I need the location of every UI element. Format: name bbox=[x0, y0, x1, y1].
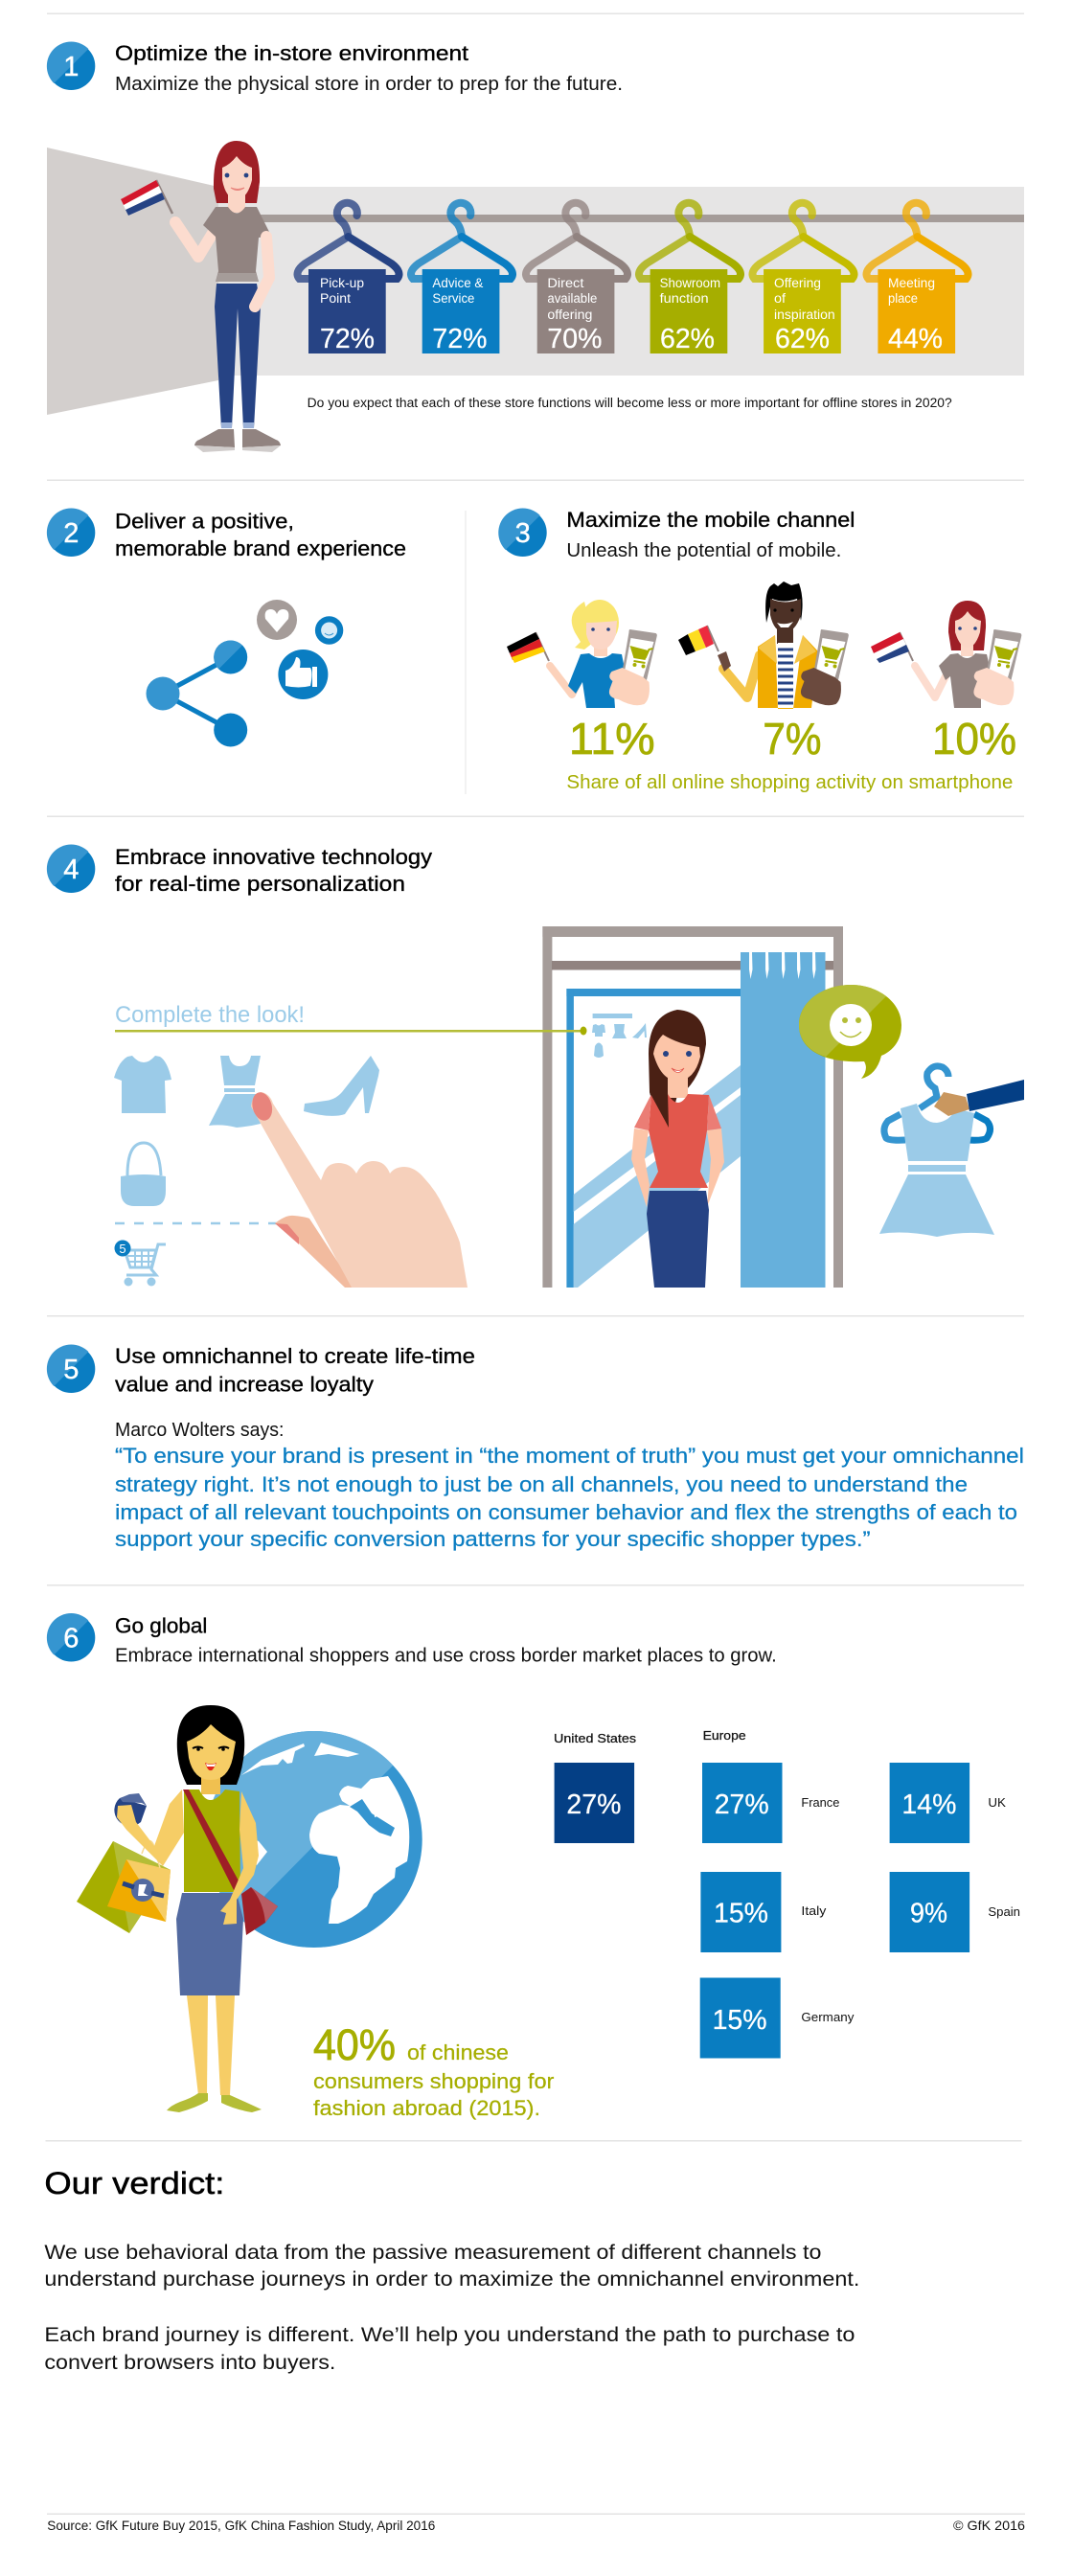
hanger tag: direct available offering bbox=[526, 203, 627, 354]
heading 5: value and increase loyalty bbox=[115, 1372, 374, 1397]
hanger tag: offering of inspiration: inspiration bbox=[774, 308, 835, 322]
hanger tag: showroom function bbox=[639, 203, 741, 354]
divider top bbox=[47, 13, 1024, 14]
number badge 2: 2 bbox=[63, 518, 79, 549]
heading 2: memorable brand experience bbox=[115, 536, 406, 560]
quote: strategy right. It’s not enough to just be on all channels, you need to understand the bbox=[115, 1472, 968, 1496]
tile: France 27% bbox=[702, 1763, 839, 1843]
tile: Spain 9%: 9% bbox=[910, 1899, 947, 1929]
stat: 40% of Chinese consumers: consumers shopping for bbox=[313, 2069, 554, 2093]
quote attribution: Marco Wolters says: bbox=[115, 1420, 284, 1441]
number badge 3 bbox=[498, 509, 547, 557]
hanger tag: meeting place: Meeting bbox=[888, 276, 935, 290]
number badge 5 bbox=[47, 1345, 95, 1393]
hanger tag: showroom function: 62% bbox=[660, 324, 715, 354]
dashed separator bbox=[115, 1222, 278, 1224]
tile: United States 27%: 27% bbox=[566, 1790, 621, 1820]
smiley speech bubble bbox=[799, 985, 901, 1079]
label: United States: United States bbox=[554, 1731, 637, 1745]
heading 6: Go global bbox=[115, 1613, 207, 1638]
tile: UK 14%: 14% bbox=[901, 1790, 956, 1820]
label: Europe: Europe bbox=[703, 1728, 746, 1743]
hanger tag: pick-up point: Pick-up bbox=[320, 276, 364, 290]
source note: Source: GfK Future Buy 2015, GfK China Fashion Study, April 2016 bbox=[47, 2518, 435, 2533]
subheading 1: Maximize the physical store in order to prep for the future. bbox=[115, 74, 623, 95]
hanger tag: direct available offering: 70% bbox=[547, 324, 602, 354]
mirror bbox=[566, 989, 741, 1288]
verdict section bbox=[44, 2166, 859, 2374]
tile: UK 14% bbox=[890, 1763, 1006, 1843]
stat: 40% of Chinese consumers: fashion abroad (2015). bbox=[313, 2096, 540, 2120]
hanger tag: direct available offering: offering bbox=[547, 308, 592, 322]
mirror screen mini icons bbox=[592, 1014, 647, 1058]
verdict paragraph 2: Each brand journey is different. We’ll help you understand the path to purchase to bbox=[44, 2324, 855, 2346]
icon: handbag bbox=[121, 1143, 166, 1206]
tile: France 27%: 27% bbox=[715, 1790, 769, 1820]
figure: woman with Dutch flag bbox=[121, 141, 281, 452]
icon: share network bbox=[146, 640, 247, 747]
clothes rail bbox=[254, 215, 1024, 222]
copyright: © GfK 2016 bbox=[953, 2518, 1025, 2533]
section 6: go global bbox=[47, 1613, 1020, 2120]
label: complete the look: Complete the look! bbox=[115, 1002, 305, 1028]
globe bbox=[213, 1731, 422, 1948]
number badge 1 bbox=[47, 42, 95, 90]
icon: shopping cart with count bbox=[115, 1240, 166, 1286]
curtain bbox=[741, 952, 826, 1288]
quote: “To ensure your brand is present in “the moment of truth” you must get your omnichannel bbox=[115, 1444, 1024, 1468]
section divider vertical bbox=[466, 511, 467, 794]
stat: 40% of Chinese consumers: 40% bbox=[313, 2020, 396, 2069]
number badge 6: 6 bbox=[63, 1623, 79, 1653]
number badge 4: 4 bbox=[63, 855, 79, 885]
hanger tag: direct available offering: available bbox=[547, 291, 597, 306]
hanger tag: advice and service: Advice & bbox=[432, 276, 483, 290]
pointer line bbox=[115, 1027, 586, 1035]
stat: Germany 11%: 11% bbox=[569, 714, 655, 764]
section 5: omnichannel bbox=[47, 1344, 1024, 1551]
stat: 40% of Chinese consumers bbox=[313, 2020, 554, 2120]
subheading 6: Embrace international shoppers and use cross border market places to grow. bbox=[115, 1646, 777, 1667]
quote: impact of all relevant touchpoints on consumer behavior and flex the strengths of each to bbox=[115, 1500, 1017, 1524]
number badge 1: 1 bbox=[63, 52, 79, 82]
hanger tag: showroom function: Showroom bbox=[660, 276, 720, 290]
hanger tag: meeting place: 44% bbox=[888, 324, 943, 354]
heading 3: Maximize the mobile channel bbox=[566, 508, 855, 532]
number badge 4 bbox=[47, 845, 95, 893]
tile: Spain 9%: Spain bbox=[988, 1904, 1020, 1919]
stat: Netherlands 10%: 10% bbox=[932, 714, 1016, 764]
tile: Italy 15%: 15% bbox=[714, 1899, 768, 1929]
section 3: maximize the mobile channel bbox=[498, 508, 1021, 793]
quote: support your specific conversion patterns for your specific shopper types.” bbox=[115, 1527, 871, 1551]
hanger tag: pick-up point: Point bbox=[320, 291, 351, 306]
hanger tag: direct available offering: Direct bbox=[547, 276, 584, 290]
verdict paragraph 1: We use behavioral data from the passive measurement of different channels to bbox=[44, 2242, 821, 2264]
section 2: positive brand experience bbox=[47, 509, 406, 747]
hanger tag: offering of inspiration: 62% bbox=[775, 324, 830, 354]
divider 4 bbox=[47, 1315, 1024, 1316]
heading 4: Embrace innovative technology bbox=[115, 845, 432, 869]
footer divider bbox=[47, 2514, 1025, 2515]
number badge 5: 5 bbox=[63, 1355, 79, 1385]
heading 2: Deliver a positive, bbox=[115, 510, 294, 533]
hanger tag: offering of inspiration: Offering bbox=[774, 276, 821, 290]
icon: heart bubble bbox=[257, 600, 297, 640]
hanger tag: meeting place: place bbox=[888, 291, 918, 306]
fitting room frame bbox=[542, 926, 843, 1288]
hanger tag: showroom function: function bbox=[660, 291, 709, 306]
divider 2 bbox=[47, 479, 1024, 481]
number badge 2 bbox=[47, 509, 95, 557]
heading 4: for real-time personalization bbox=[115, 872, 405, 896]
figure: woman in fitting room bbox=[631, 1010, 724, 1288]
hanger tag: advice and service bbox=[411, 203, 513, 354]
survey question: Do you expect that each of these store functions will become less or more important for offline stores in 2020? bbox=[308, 396, 952, 410]
icon: dress bbox=[209, 1056, 261, 1128]
tile: UK 14%: UK bbox=[988, 1795, 1006, 1810]
icon: t-shirt bbox=[114, 1056, 171, 1113]
divider 3 bbox=[47, 816, 1024, 817]
verdict heading: Our verdict: bbox=[44, 2166, 224, 2200]
hanger tag: advice and service: 72% bbox=[432, 324, 487, 354]
tile: Germany 15% bbox=[700, 1977, 855, 2058]
figure: red-haired woman with Dutch flag and phone bbox=[871, 601, 1021, 708]
icon: shopping cart with count: 5 bbox=[119, 1242, 126, 1256]
verdict paragraph 2: convert browsers into buyers. bbox=[44, 2352, 335, 2374]
caption: smartphone share: Share of all online shopping activity on smartphone bbox=[566, 772, 1013, 793]
icon: smile bubble bbox=[315, 616, 343, 645]
tile: Germany 15%: Germany bbox=[801, 2010, 855, 2024]
heading 5: Use omnichannel to create life-time bbox=[115, 1344, 475, 1368]
stat: Belgium 7%: 7% bbox=[763, 714, 821, 764]
tile: France 27%: France bbox=[801, 1795, 839, 1810]
figure: shopper woman bbox=[77, 1705, 278, 2112]
tile: Italy 15% bbox=[700, 1872, 827, 1952]
illustration: pointing hand bbox=[249, 1090, 468, 1288]
tile: Italy 15%: Italy bbox=[801, 1904, 827, 1918]
tile: Spain 9% bbox=[890, 1872, 1020, 1952]
tile: United States 27% bbox=[555, 1763, 634, 1843]
verdict paragraph 1: understand purchase journeys in order to maximize the omnichannel environment. bbox=[44, 2268, 859, 2291]
hanger tag: advice and service: Service bbox=[432, 291, 474, 306]
hanger tag: pick-up point bbox=[297, 203, 399, 354]
tile: Germany 15%: 15% bbox=[713, 2005, 767, 2036]
section 1: optimize the in-store environment bbox=[47, 41, 1024, 452]
hanger tag: pick-up point: 72% bbox=[320, 324, 375, 354]
figure: man with Belgian flag and phone bbox=[678, 581, 849, 709]
figure: blonde woman with German flag and phone bbox=[507, 600, 657, 708]
subheading 3: Unleash the potential of mobile. bbox=[566, 540, 841, 561]
number badge 3: 3 bbox=[515, 518, 531, 549]
heading 1: Optimize the in-store environment bbox=[115, 41, 468, 65]
divider 6 bbox=[46, 2140, 1021, 2142]
hanger tag: offering of inspiration: of bbox=[774, 291, 786, 306]
number badge 6 bbox=[47, 1613, 95, 1661]
icon: high heel bbox=[304, 1056, 379, 1116]
section 4: innovative technology bbox=[47, 845, 1024, 1288]
store backdrop wall bbox=[47, 148, 218, 415]
store backdrop band bbox=[218, 187, 1024, 376]
divider 5 bbox=[47, 1584, 1024, 1586]
hanger tag: meeting place bbox=[866, 203, 968, 354]
dress on hanger held by hand bbox=[879, 1066, 1024, 1237]
hanger tag: offering of inspiration bbox=[753, 203, 855, 354]
icon: thumbs up bubble bbox=[278, 650, 328, 699]
stat: 40% of Chinese consumers: of chinese bbox=[407, 2040, 509, 2064]
